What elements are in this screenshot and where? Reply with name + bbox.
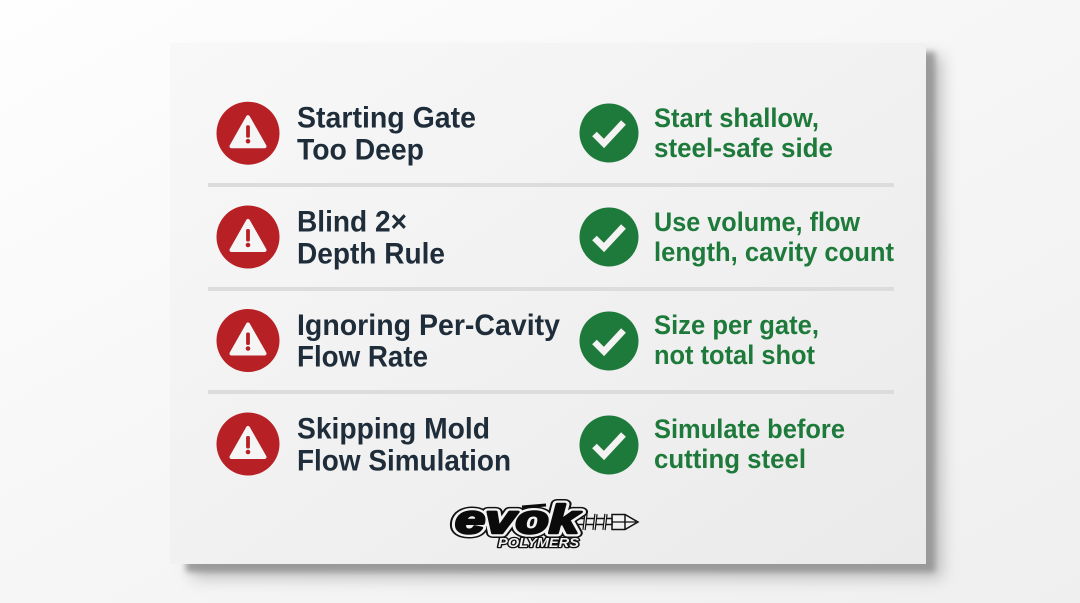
row 1 [216, 102, 833, 166]
logo bullet icon [576, 514, 638, 530]
icon: warning [216, 102, 280, 165]
problem text: Skipping Mold [297, 412, 490, 446]
row 4 [216, 412, 845, 478]
row 3 [216, 309, 819, 374]
row dividers [208, 183, 894, 394]
problem text: Blind 2× [297, 206, 407, 238]
problem text: Starting Gate [297, 102, 476, 134]
icon: warning [216, 412, 280, 476]
card shadow [186, 52, 942, 578]
icon: check [580, 312, 638, 370]
problem text: Flow Simulation [297, 444, 511, 478]
problem text [297, 309, 560, 374]
solution text [654, 207, 894, 267]
solution text: Start shallow, [654, 103, 819, 133]
icon: warning [216, 206, 280, 268]
logo macron [522, 505, 546, 507]
icon: check [580, 208, 638, 266]
logo wordmark: evok [455, 498, 581, 542]
problem text: Ignoring Per-Cavity [297, 309, 560, 342]
solution text: Use volume, flow [654, 207, 861, 237]
solution text [654, 310, 819, 370]
icon: warning [216, 309, 280, 372]
logo wordmark outline: evok [455, 498, 581, 542]
icon: check [580, 416, 638, 474]
logo tagline: POLYMERS [498, 536, 580, 550]
solution text: cutting steel [654, 444, 806, 474]
problem text [297, 206, 445, 270]
solution text: steel-safe side [654, 133, 833, 163]
logo: evok polymers [455, 498, 638, 550]
problem text [297, 412, 511, 478]
problem text [297, 102, 476, 166]
solution text: length, cavity count [654, 237, 894, 267]
problem text: Depth Rule [297, 238, 445, 270]
problem text: Flow Rate [297, 340, 428, 374]
problem text: Too Deep [297, 134, 424, 166]
icon: check [580, 104, 638, 162]
panel: card [170, 43, 926, 564]
solution text [654, 103, 833, 163]
solution text: not total shot [654, 340, 815, 370]
solution text [654, 414, 845, 474]
row 2 [216, 206, 894, 270]
logo wordmark halo: evok [455, 498, 581, 542]
solution text: Simulate before [654, 414, 845, 444]
solution text: Size per gate, [654, 310, 819, 340]
